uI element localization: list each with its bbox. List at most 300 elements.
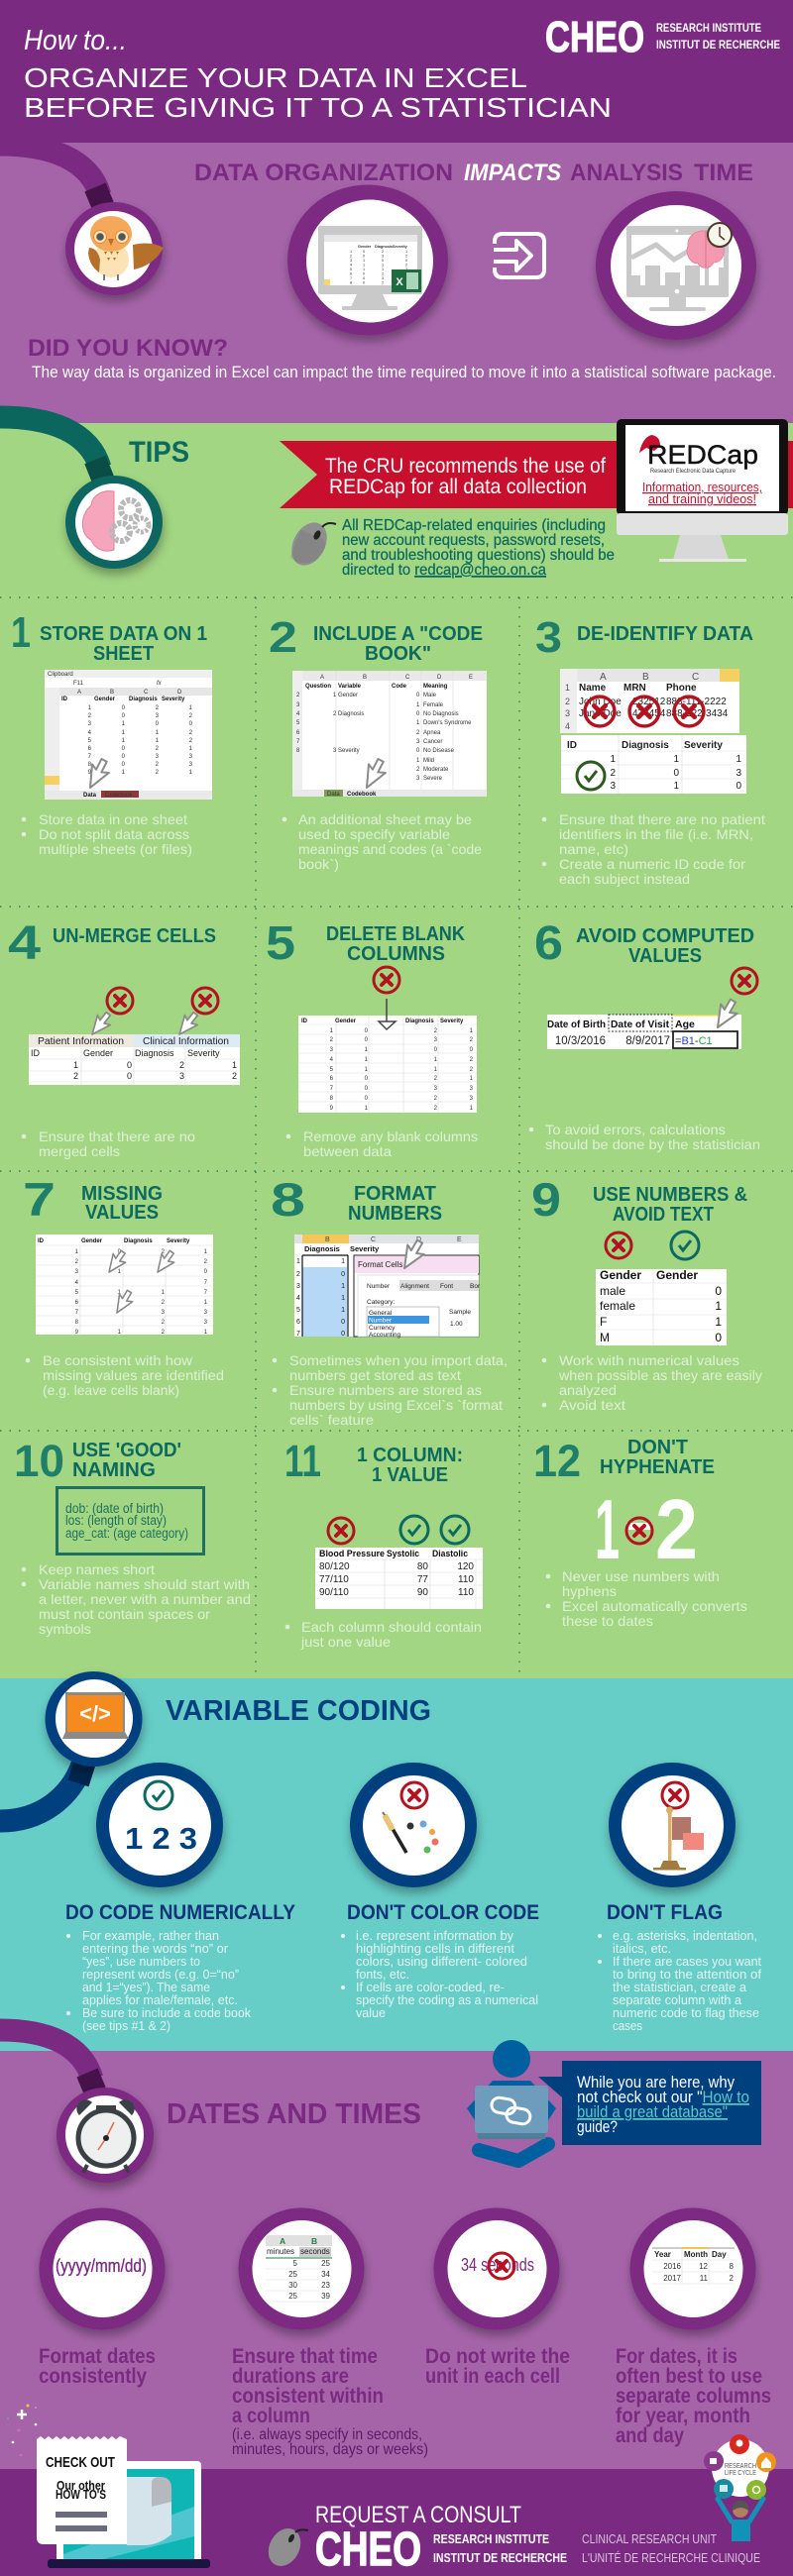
circle: year month day table: Day: [712, 2250, 727, 2259]
heading: DELETE BLANK: [326, 923, 465, 945]
screenshot: format cells dialog: BCDE: [325, 1236, 462, 1243]
text: separate columns for dates: separate columns: [616, 2385, 771, 2408]
screenshot: format cells dialog: Sample: [449, 1309, 471, 1316]
text: time durations: (i.e. always specify in seconds,: [232, 2426, 422, 2443]
heading: DE-IDENTIFY DATA: [577, 623, 753, 645]
text: format dates consistently: consistently: [39, 2365, 147, 2388]
heading: USE 'GOOD': [72, 1440, 181, 1461]
bullets: Ensure that there are no patient: [559, 811, 765, 827]
screenshot: identifiable table: [560, 669, 739, 733]
circle: duration table: seconds: [300, 2247, 330, 2256]
icon: magnifier with laptop code: [0, 1671, 143, 1821]
callout: database guide: not check out our "How to: [577, 2088, 749, 2106]
screenshot: merged table: Severity: [187, 1048, 220, 1058]
text: time durations: durations are: [232, 2365, 349, 2388]
heading: UN-MERGE CELLS: [53, 925, 216, 947]
main title: ORGANIZE YOUR DATA IN EXCEL: [24, 62, 527, 93]
screenshot: blood pressure table: 77: [417, 1574, 428, 1585]
icon: footer computer mouse: [262, 2522, 308, 2572]
screenshot: blood pressure table: 110: [458, 1574, 474, 1585]
tip 6: avoid computed values: 6: [534, 917, 563, 970]
screenshot: blood pressure table: 90/110: [319, 1587, 349, 1598]
circle: duration table: 5: [293, 2259, 298, 2268]
screenshot: de-identified table: 203: [610, 768, 741, 779]
screenshot: format cells dialog: Alignment: [400, 1283, 429, 1290]
text: time durations: consistent within: [232, 2385, 384, 2408]
screenshot: code book: 1: [416, 702, 420, 708]
screenshot: computed formula: 8/9/2017: [625, 1035, 670, 1047]
screenshot: computed formula: Age: [675, 1019, 695, 1030]
screenshot: code book: 1: [416, 720, 420, 726]
screenshot: computed formula: Date of Visit: [611, 1019, 669, 1030]
tip 7: missing values: [23, 1173, 224, 1398]
heading: do code numerically: DO CODE NUMERICALLY: [65, 1901, 295, 1924]
screenshot: identifiable table: 3: [565, 708, 570, 718]
circle: year month day table: 2016: [663, 2262, 682, 2271]
bullets: [22, 811, 192, 857]
screenshot: spreadsheet: F11: [73, 681, 84, 687]
bullets: Sometimes when you import data,: [289, 1352, 508, 1368]
bullets: [283, 811, 482, 872]
bullets: Remove any blank columns: [303, 1128, 478, 1144]
text: code numerically bullets: entering the words “no” or: [82, 1941, 229, 1956]
icon: excel data on monitor: Gender: [358, 245, 372, 249]
bullets: [542, 1352, 762, 1413]
panel: variable coding: [0, 1671, 793, 2051]
screenshot: computed formula: [547, 1015, 741, 1049]
screenshot: blank column table: 3100: [330, 1047, 474, 1053]
bullets: analyzed: [559, 1382, 617, 1398]
bullets: should be done by the statistician: [545, 1136, 760, 1152]
heading: DON'T: [627, 1437, 688, 1458]
tip 1: store data on 1 sheet: 1: [11, 608, 31, 657]
screenshot: spreadsheet: Data: [83, 793, 97, 799]
screenshot: code book: 3: [416, 776, 420, 782]
bullets: these to dates: [562, 1613, 653, 1629]
heading: SHEET: [93, 643, 154, 665]
icon: magnifier with brain and gears: [0, 417, 163, 569]
circle: duration table: 25: [288, 2292, 298, 2301]
text: time durations: minutes, hours, days or weeks): [232, 2441, 428, 2458]
screenshot: identifiable table: 2: [565, 697, 570, 706]
icons: wrong and right columns: [328, 1516, 469, 1544]
heading: did you know: DID YOU KNOW?: [28, 335, 228, 362]
screenshot: spreadsheet: ABCD: [77, 690, 182, 696]
bullets: [286, 1128, 478, 1159]
screenshot: spreadsheet: Clipboard: [48, 672, 73, 678]
bullets: [26, 1352, 224, 1398]
heading: data organization impacts analysis time: TIME: [694, 160, 753, 186]
icon: excel data on monitor: 3100: [350, 259, 407, 263]
circle: year month day table: 8: [730, 2262, 735, 2271]
circle: numbers with check: 1 2 3: [125, 1821, 197, 1856]
heading: [348, 1183, 442, 1225]
screenshot: spreadsheet: 6021: [88, 746, 193, 752]
bullets: [22, 1128, 195, 1159]
bullets: To avoid errors, calculations: [545, 1122, 726, 1137]
screenshot: de-identified table: 111: [610, 754, 741, 765]
screenshot: text vs number table: 1: [715, 1299, 722, 1313]
logo: footer CHEO research institute: INSTITUT DE RECHERCHE: [433, 2550, 567, 2565]
icon: excel data on monitor: Severity: [393, 245, 408, 249]
heading: [81, 1183, 163, 1224]
text: separate columns for dates: for year, month: [616, 2405, 750, 2427]
bullets: numbers get stored as text: [289, 1367, 461, 1383]
screenshot: missing values table: 621: [75, 1300, 208, 1306]
text: format dates consistently: [39, 2345, 156, 2388]
screenshot: missing values table: Gender: [81, 1238, 103, 1244]
screenshot: code book: Data: [327, 792, 340, 798]
bullets: Ensure that there are no: [39, 1128, 195, 1144]
screenshot: format cells dialog: 4: [296, 1295, 300, 1302]
tip 1: store data on 1 sheet: [11, 608, 212, 857]
screenshot: computed formula: Date of Birth: [547, 1019, 606, 1030]
text: time durations: a column: [232, 2405, 310, 2427]
main title: BEFORE GIVING IT TO A STATISTICIAN: [24, 92, 612, 123]
text: separate columns for dates: For dates, it is: [616, 2345, 737, 2368]
screenshot: format cells dialog: Severity: [350, 1244, 380, 1253]
tip 9: use numbers and avoid text: 9: [531, 1173, 561, 1226]
text: redcap enquiries: directed to redcap@cheo.on.ca: [342, 562, 546, 579]
screenshot: blank column table: Gender: [335, 1019, 357, 1024]
screenshot: text vs number table: Gender: [600, 1268, 641, 1282]
heading: data organization impacts analysis time: DATA ORGANIZATION: [194, 160, 453, 186]
heading: AVOID COMPUTED: [576, 925, 754, 947]
screenshot: merged table: 2032: [73, 1071, 237, 1081]
screenshot: blank column table: 1021: [330, 1028, 474, 1034]
logo: CHEO research institute: CHEO: [545, 13, 644, 61]
screenshot: spreadsheet: 5112: [88, 738, 193, 744]
bullets: [273, 1352, 508, 1428]
screenshot: code book: 2: [416, 730, 420, 736]
icon: redcap monitor: [617, 419, 788, 562]
screenshot: format cells dialog: 7: [296, 1331, 300, 1338]
icon: magnifier with laptop code: </>: [79, 1701, 111, 1726]
logo: CHEO research institute: RESEARCH INSTITUTE: [656, 21, 761, 35]
bullets: identifiers in the file (i.e. MRN,: [559, 826, 753, 842]
screenshot: identifiable table: John Doe: [579, 697, 622, 707]
screenshot: spreadsheet: 4112: [88, 730, 193, 736]
screenshot: merged table: 1021: [73, 1060, 237, 1070]
screenshot: text vs number table: [596, 1268, 727, 1345]
screenshot: de-identified table: Diagnosis: [622, 740, 669, 751]
circle: duration table: 30: [288, 2281, 298, 2290]
screenshot: text vs number table: Gender: [656, 1268, 698, 1282]
naming examples box: los: (length of stay): [65, 1513, 167, 1528]
screenshot: format cells dialog: 5: [296, 1307, 300, 1314]
panel: tips: [0, 417, 793, 1678]
screenshot: missing values table: 310: [75, 1269, 208, 1275]
screenshot: computed formula: =B1-C1: [675, 1035, 713, 1047]
screenshot: code book: Moderate: [423, 767, 449, 773]
screenshot: blood pressure table: 90: [417, 1587, 428, 1598]
graphic: 1-2 crossed hyphen: 2: [655, 1483, 698, 1577]
text: flag bullets: numeric code to flag these: [613, 2005, 759, 2020]
icon: redcap monitor: Information, resources,: [642, 481, 762, 494]
circle: flag with cross: [609, 1763, 736, 1887]
text: code numerically bullets: [66, 1928, 251, 2033]
tip 7: missing values: 7: [23, 1173, 56, 1226]
text: color code bullets: fonts, etc.: [356, 1967, 409, 1982]
screenshot: format cells dialog: 6: [296, 1319, 300, 1326]
icon: research life cycle: [704, 2434, 776, 2541]
text: separate columns for dates: [616, 2345, 771, 2447]
tip 12: don't hyphenate: [533, 1436, 747, 1629]
icon: check out other how-tos laptop: CHECK OUT: [46, 2454, 115, 2471]
heading: don't color code: DON'T COLOR CODE: [347, 1901, 539, 1924]
screenshot: code book: Meaning: [423, 684, 448, 690]
bullets: cells` feature: [289, 1412, 374, 1428]
icon: excel data on monitor: 1021: [350, 250, 407, 254]
heading: BOOK": [365, 643, 431, 665]
icon: magnifier with owl: [0, 145, 164, 295]
screenshot: spreadsheet: 2032: [88, 713, 193, 719]
heading: request a consult: REQUEST A CONSULT: [315, 2502, 521, 2528]
circle: year month day table: Year: [654, 2250, 671, 2259]
bullets: [546, 1568, 747, 1629]
naming examples box: age_cat: (age category): [65, 1526, 188, 1541]
bullets: Excel automatically converts: [562, 1598, 747, 1614]
screenshot: code book: Diagnosis: [338, 711, 364, 717]
heading: data organization impacts analysis time: [194, 160, 753, 186]
screenshot: missing values table: 733: [75, 1310, 208, 1316]
screenshot: text vs number table: 0: [715, 1284, 722, 1298]
screenshot: missing values table: 22: [75, 1259, 208, 1265]
screenshot: missing values table: ID: [38, 1238, 45, 1244]
screenshot: missing values table: Diagnosis: [124, 1238, 153, 1244]
screenshot: blood pressure table: Blood Pressure: [319, 1549, 385, 1558]
tip 12: don't hyphenate: 12: [533, 1436, 581, 1486]
screenshot: blank column table: Severity: [440, 1019, 464, 1024]
circle: year month day table: 11: [700, 2274, 709, 2283]
screenshot: code book: Apnea: [423, 730, 441, 736]
screenshot: format cells dialog: [294, 1234, 481, 1339]
screenshot: spreadsheet: Codebook: [105, 793, 133, 799]
screenshot: format cells dialog: 1: [341, 1307, 345, 1314]
icon: redcap monitor: and training videos!: [648, 492, 756, 506]
screenshot: code book: Question: [305, 684, 331, 690]
screenshot: blank column table: 4112: [330, 1057, 474, 1063]
bullets: meanings and codes (a `code: [298, 841, 482, 857]
screenshot: format cells dialog: 0: [341, 1319, 345, 1326]
bullets: Be consistent with how: [43, 1352, 193, 1368]
screenshot: code book: 4: [296, 711, 300, 717]
screenshot: merged table: Patient Information: [38, 1036, 124, 1047]
screenshot: spreadsheet: Diagnosis: [129, 697, 158, 702]
screenshot: format cells dialog: Format Cells: [358, 1260, 402, 1269]
screenshot: computed formula: 10/3/2016: [555, 1035, 606, 1047]
screenshot: identifiable table: MRN: [623, 683, 646, 694]
screenshot: text vs number table: 0: [715, 1331, 722, 1344]
bullets: Each column should contain: [301, 1619, 482, 1635]
screenshot: identifiable table: Name: [579, 683, 607, 694]
screenshot: format cells dialog: Accounting: [369, 1332, 401, 1339]
screenshot: blank column table: 6021: [330, 1076, 474, 1082]
screenshot: blood pressure table: 80/120: [319, 1561, 350, 1572]
text: color code bullets: highlighting cells in different: [356, 1941, 514, 1956]
bullets: just one value: [300, 1634, 391, 1650]
icon: delete marker with arrow: [374, 967, 399, 1029]
tip 8: format numbers: 8: [271, 1173, 305, 1226]
heading: [357, 1445, 463, 1486]
bullets: [542, 811, 765, 887]
text: color code bullets: colors, using different- colored: [356, 1954, 527, 1969]
icon: excel data on monitor: X: [396, 276, 403, 288]
screenshot: blank column table: [298, 1016, 477, 1113]
text: do not write the unit: Do not write the: [425, 2345, 570, 2368]
screenshot: merged table: ID: [31, 1048, 41, 1058]
bullets: An additional sheet may be: [298, 811, 472, 827]
screenshot: blank column table: 9121: [330, 1106, 474, 1112]
circle: date format: (yyyy/mm/dd): [56, 2256, 147, 2276]
screenshot: spreadsheet: Severity: [162, 697, 185, 702]
icon: analysis chart on monitor with brain and clock: [596, 191, 756, 340]
screenshot: de-identified table: Severity: [684, 740, 723, 751]
screenshot: identifiable table: ABC: [600, 672, 699, 683]
screenshot: code book: Mild: [423, 758, 434, 764]
panel: dates and times: [0, 2030, 793, 2469]
screenshot: code book: Variable: [338, 684, 362, 690]
bullets: (e.g. leave cells blank): [43, 1382, 179, 1398]
icon: computed marker: [710, 968, 757, 1032]
heading: HYPHENATE: [600, 1456, 715, 1478]
heading: STORE DATA ON 1: [40, 623, 207, 645]
screenshot: identifiable table: Phone: [666, 683, 697, 694]
screenshot: code book: 8: [296, 748, 300, 754]
circle: year month day table: Month: [684, 2250, 708, 2259]
screenshot: spreadsheet: Gender: [94, 697, 116, 702]
panel: footer: [0, 2404, 793, 2576]
screenshot: missing values table: Severity: [167, 1238, 190, 1244]
screenshot: blank column table: 8023: [330, 1096, 474, 1102]
icon: person with laptop: [467, 2040, 556, 2161]
tip 5: delete blank columns: [266, 917, 478, 1159]
screenshot: identifiable table: 888-222-3434: [666, 708, 729, 719]
screenshot: format cells dialog: General: [369, 1310, 393, 1317]
circle: no unit in cell: 34 seconds: [461, 2255, 534, 2275]
screenshot: code book: 2: [296, 693, 300, 698]
screenshot: identifiable table: 474454: [632, 708, 666, 719]
icons: wrong and right: [606, 1232, 699, 1259]
panel: did you know: [0, 143, 793, 423]
screenshot: format cells dialog: 3: [296, 1283, 300, 1290]
heading: dates and times: DATES AND TIMES: [167, 2098, 421, 2130]
tip 10: use good naming: 10: [14, 1436, 64, 1486]
bullets: Never use numbers with: [562, 1568, 720, 1584]
screenshot: code book: 7: [296, 739, 300, 745]
screenshot: format cells dialog: Number: [367, 1283, 391, 1290]
screenshot: code book: Male: [423, 693, 437, 698]
screenshot: code book: Down's Syndrome: [423, 720, 472, 726]
heading: data organization impacts analysis time: ANALYSIS: [570, 160, 683, 186]
circle: duration table: 34: [321, 2270, 331, 2279]
heading: 1 COLUMN:: [357, 1445, 463, 1466]
circle: year month day table: 12: [699, 2262, 709, 2271]
screenshot: format cells dialog: 0: [341, 1271, 345, 1278]
text: flag bullets: If there are cases you want: [613, 1954, 761, 1969]
text: flag bullets: separate column with a: [613, 1992, 742, 2007]
icon: redcap monitor: REDCap: [647, 440, 758, 470]
banner: redcap recommendation: [280, 441, 793, 508]
screenshot: code book: ABCDE: [320, 675, 473, 681]
bullets: Keep names short: [39, 1561, 155, 1577]
heading: MISSING: [81, 1183, 163, 1205]
callout: database guide: build a great database": [577, 2102, 728, 2121]
circle: palette with cross: [350, 1763, 477, 1887]
bullets: used to specify variable: [298, 826, 450, 842]
screenshot: blank column table: 7033: [330, 1086, 474, 1092]
screenshot: format cells dialog: 1: [296, 1258, 300, 1265]
bullets: merged cells: [39, 1143, 120, 1159]
heading: NUMBERS: [348, 1203, 442, 1225]
screenshot: blood pressure table: [315, 1548, 483, 1609]
logo: footer CHEO research institute: CHEO: [315, 2523, 421, 2576]
heading: [40, 623, 207, 665]
screenshot: format cells dialog: 1.00: [450, 1321, 463, 1328]
text: code numerically bullets: applies for male/female, etc.: [82, 1992, 238, 2007]
screenshot: format cells dialog: Diagnosis: [304, 1244, 340, 1253]
screenshot: text vs number table: F: [600, 1315, 607, 1329]
screenshot: code book: 1: [333, 693, 337, 698]
bullets: book`): [298, 856, 339, 872]
screenshot: format cells dialog: Font: [440, 1283, 453, 1290]
bullets: Do not split data across: [39, 826, 189, 842]
callout: database guide: guide?: [577, 2117, 618, 2136]
screenshot: merged table: Diagnosis: [135, 1048, 174, 1058]
icon: excel data on monitor: 802: [350, 281, 384, 285]
screenshot: code book: 3: [416, 739, 420, 745]
screenshot: code book: [292, 671, 487, 798]
graphic: 1-2 crossed hyphen: [595, 1483, 698, 1577]
screenshot: text vs number table: M: [600, 1331, 610, 1344]
screenshot: text vs number table: male: [600, 1284, 625, 1298]
text: clinical research unit: [582, 2531, 760, 2565]
bullets: multiple sheets (or files): [39, 841, 192, 857]
bullets: name, etc): [559, 841, 628, 857]
bullets: Ensure numbers are stored as: [289, 1382, 482, 1398]
text: code numerically bullets: (see tips #1 & 2): [82, 2018, 170, 2033]
text: color code bullets: i.e. represent information by: [356, 1928, 513, 1943]
text: flag bullets: to bring to the attention of: [613, 1967, 761, 1982]
circle: no unit in cell: [434, 2207, 559, 2330]
icon: check out other how-tos laptop: Our other: [57, 2479, 105, 2493]
screenshot: spreadsheet: fx: [157, 681, 163, 687]
screenshot: code book: Severity: [338, 748, 360, 754]
panel: header: [0, 0, 793, 143]
logo: footer CHEO research institute: RESEARCH INSTITUTE: [433, 2531, 549, 2546]
bullets: must not contain spaces or: [39, 1606, 210, 1622]
tip 4: un-merge cells: [8, 917, 240, 1159]
screenshot: identifiable table: 888-111-2222: [666, 697, 727, 707]
screenshot: code book: 1: [416, 758, 420, 764]
tip 4: un-merge cells: 4: [8, 917, 41, 970]
screenshot: format cells dialog: Category:: [367, 1299, 395, 1306]
screenshot: code book: 5: [296, 720, 300, 726]
heading: [576, 925, 754, 967]
bullets: Work with numerical values: [559, 1352, 739, 1368]
text: do not write the unit: unit in each cell: [425, 2365, 560, 2388]
screenshot: code book: Codebook: [347, 792, 377, 798]
heading: COLUMNS: [347, 943, 445, 965]
icon: check out other how-tos laptop: [7, 2404, 210, 2568]
icon: computer mouse: [284, 516, 336, 572]
screenshot: blood pressure table: 77/110: [319, 1574, 349, 1585]
screenshot: code book: Gender: [338, 693, 358, 698]
text: color code bullets: value: [356, 2005, 386, 2020]
text: redcap enquiries: new account requests, password resets,: [342, 532, 605, 549]
heading: [313, 623, 483, 665]
screenshot: de-identified table: 310: [610, 781, 741, 792]
